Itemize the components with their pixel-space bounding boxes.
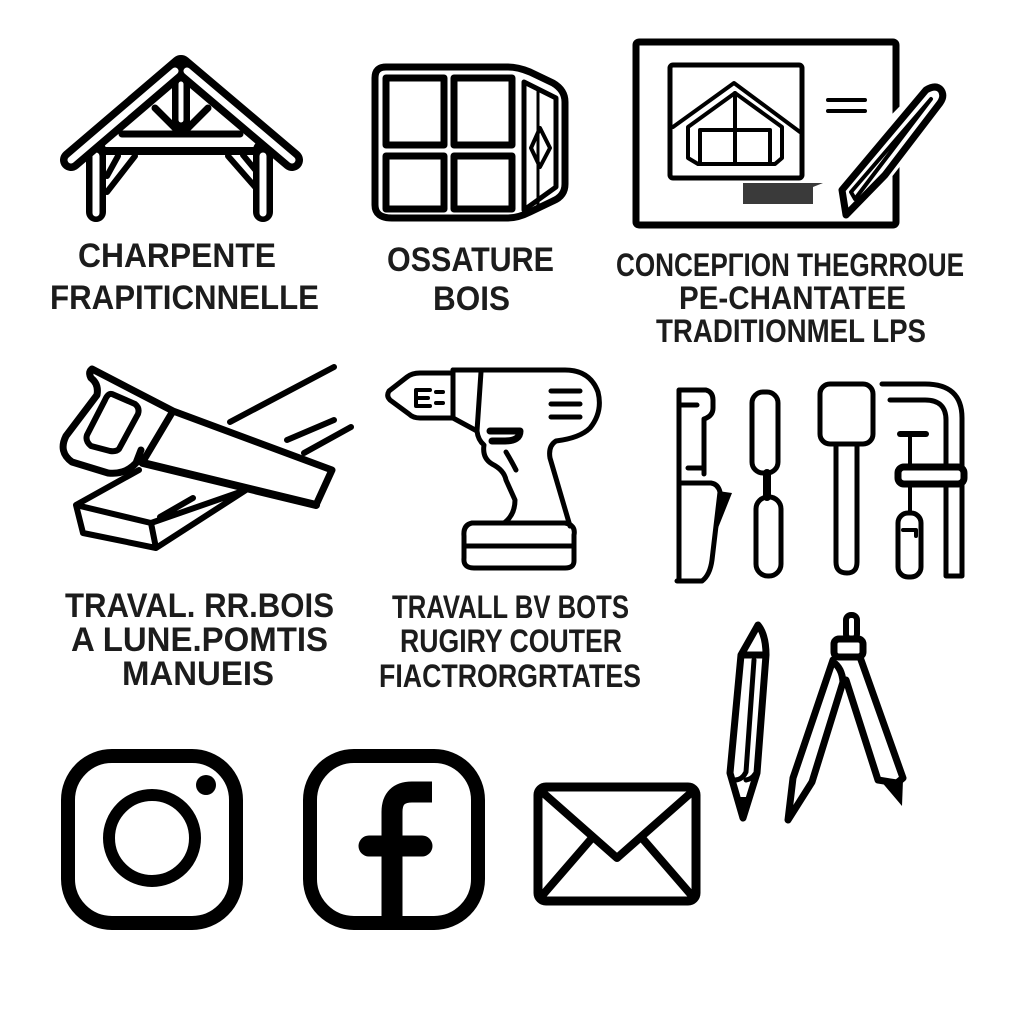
icon: chisel	[752, 392, 781, 576]
panel: conception	[616, 42, 964, 349]
icon: compass	[788, 615, 903, 820]
caption: travail perceuse	[379, 589, 641, 694]
icon: hand tools	[677, 384, 964, 820]
icon: mallet	[820, 384, 873, 573]
caption: ossature bois	[387, 241, 554, 318]
icon: pencil	[730, 625, 766, 820]
caption: travail manuel: MANUEIS	[122, 655, 274, 693]
caption: charpente	[50, 237, 319, 317]
caption: travail manuel: TRAVAL. RR.BOIS	[65, 587, 334, 625]
icon: timber frame window	[375, 67, 565, 218]
panel: travail manuel	[63, 367, 351, 693]
caption: ossature bois: OSSATURE	[387, 241, 554, 279]
caption: travail manuel	[65, 587, 334, 693]
icon: roof truss	[71, 66, 292, 213]
panel: charpente	[50, 66, 319, 317]
caption: conception: PE-CHANTATEE	[679, 280, 906, 316]
panel: ossature bois	[375, 67, 565, 318]
panel: contact icons	[68, 756, 696, 923]
caption: travail manuel: A LUNE.POMTIS	[71, 621, 328, 659]
caption: travail perceuse: RUGIRY COUTER	[400, 623, 622, 659]
caption: travail perceuse: TRAVALL BV BOTS	[392, 589, 629, 625]
caption: charpente: CHARPENTE	[78, 237, 276, 275]
icon: instagram	[68, 756, 236, 923]
icon: envelope	[538, 787, 696, 901]
icon: clamp	[882, 384, 964, 577]
caption: charpente: FRAPITICNNELLE	[50, 279, 319, 317]
icon: facebook	[310, 756, 478, 923]
panel: travail perceuse	[379, 370, 641, 694]
icon: hand saw and plank	[63, 367, 351, 548]
caption: conception	[616, 247, 964, 349]
icon: blueprint with pencil	[636, 42, 944, 225]
caption: conception: TRADITIONMEL LPS	[656, 313, 926, 349]
icon: knife	[677, 390, 732, 581]
caption: ossature bois: BOIS	[433, 280, 510, 318]
caption: travail perceuse: FIACTRORGRTATES	[379, 658, 641, 694]
icon: cordless drill	[388, 370, 599, 568]
